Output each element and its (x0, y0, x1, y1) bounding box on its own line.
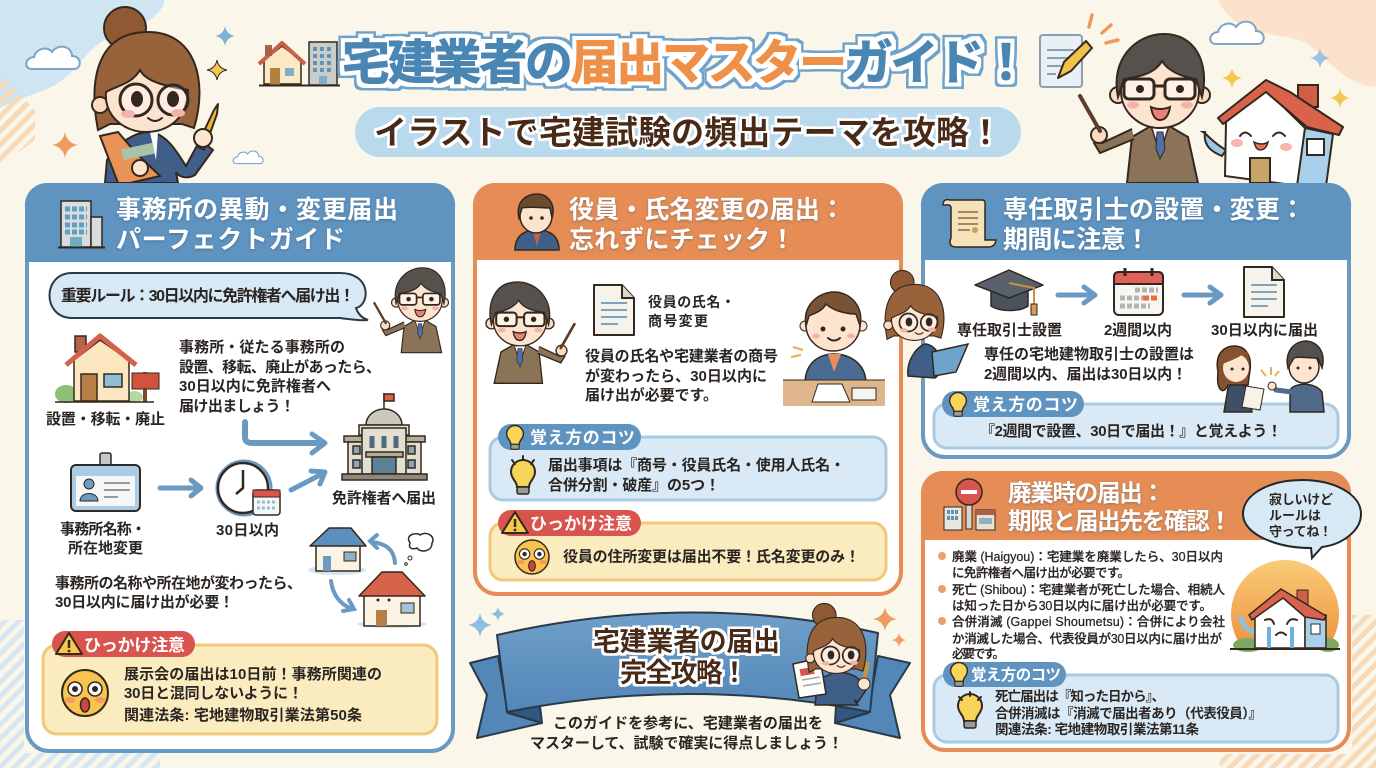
tip text: 関連法条: 宅地建物取引業法第11条 (995, 721, 1200, 737)
icon: surprised face (515, 540, 549, 574)
list of filings (938, 549, 1225, 661)
warning text: 30日と混同しないように！ (124, 685, 303, 702)
tip tag: 覚え方のコツ (530, 428, 635, 448)
labels: 専任取引士設置 (957, 321, 1062, 339)
heading (116, 196, 398, 254)
decorative blob top left (0, 0, 165, 108)
heading: パーフェクトガイド (116, 226, 345, 254)
icon: office building (58, 201, 105, 248)
text (648, 294, 735, 329)
labels: 30日以内に届出 (1211, 322, 1318, 339)
tip text: 合併分割・破産』の5つ！ (548, 476, 720, 494)
character: woman with book (92, 7, 218, 183)
sparkles (52, 26, 1350, 158)
character: man presenter (374, 268, 448, 353)
tip tag: 覚え方のコツ (973, 394, 1078, 414)
warning tag: ひっかけ注意 (530, 514, 632, 534)
list of filings: 廃業 (Haigyou)：宅建業を廃業したら、30日以内 (952, 549, 1223, 564)
tip tag (942, 391, 1084, 417)
arrow (245, 422, 325, 453)
subtitle pill (355, 107, 1021, 157)
panel: closing business (921, 471, 1361, 750)
text (585, 347, 778, 404)
warning text: 展示会の届出は10日前！事務所関連の (124, 665, 382, 683)
label: 設置・移転・廃止 (46, 410, 165, 428)
panel header (473, 183, 903, 260)
text: 専任の宅地建物取引士の設置は (984, 345, 1194, 363)
heading: 廃業時の届出： (1008, 480, 1165, 506)
character: man with pointer (1080, 34, 1210, 183)
heading: 期間に注意！ (1003, 226, 1150, 254)
banner ribbon (468, 603, 910, 752)
callout: speech bubble: ルールは (1269, 508, 1321, 523)
heading: 専任取引士の設置・変更： (1003, 196, 1305, 224)
icon: ID card (71, 453, 140, 511)
labels: 事務所名称・ (60, 520, 146, 538)
list of filings: 合併消滅 (Gappei Shoumetsu)：合併により会社 (952, 614, 1225, 629)
tip text: 死亡届出は『知った日から』、 (995, 689, 1165, 704)
text: 商号変更 (648, 313, 708, 329)
warning box (490, 510, 886, 580)
tip text: 『2週間で設置、30日で届出！』と覚えよう！ (980, 422, 1282, 440)
panel: dedicated broker (921, 183, 1351, 457)
text: 届け出が必要です。 (585, 386, 718, 404)
arrow (1184, 287, 1221, 303)
tip tag (943, 662, 1066, 687)
arrow (291, 471, 325, 490)
icon: sad house with sunset (1230, 560, 1340, 652)
icon: house and building (259, 42, 340, 86)
labels (957, 321, 1318, 339)
character: woman reading, overlapping panels (884, 270, 968, 378)
text: 2週間以内、届出は30日以内！ (984, 366, 1187, 383)
cloud top right (1210, 22, 1264, 44)
cloud top left (26, 47, 80, 69)
warning tag: ひっかけ注意 (84, 636, 185, 655)
subtitle pill: イラストで宅建試験の頻出テーマを攻略！ (374, 114, 1002, 151)
icon: moving houses (308, 528, 433, 628)
callout: speech bubble: 守ってね！ (1269, 524, 1332, 539)
warning box (43, 631, 437, 734)
text: 役員の氏名や宅建業者の商号 (585, 347, 778, 365)
heading: 事務所の異動・変更届出 (116, 196, 398, 224)
callout: key rule: 重要ルール：30日以内に免許権者へ届け出！ (61, 286, 355, 305)
heading (1003, 196, 1305, 254)
icon: surprised face (62, 670, 108, 716)
icon: document (594, 285, 634, 335)
warning tag (52, 631, 195, 657)
warning tag (498, 510, 641, 536)
icon: government building (342, 393, 427, 480)
arrow (160, 480, 201, 496)
heading: 期限と届出先を確認！ (1008, 508, 1232, 534)
panel header (921, 183, 1351, 260)
list of filings: 必要です。 (952, 647, 1005, 661)
warning text: 役員の住所変更は届出不要！氏名変更のみ！ (563, 548, 860, 566)
tip text: 合併消滅は『消滅で届出者あり（代表役員）』 (995, 705, 1262, 721)
banner title: 宅建業者の届出 (593, 627, 780, 657)
tip tag: 覚え方のコツ (971, 665, 1061, 684)
text: が変わったら、30日以内に (585, 367, 767, 385)
warning text: 関連法条: 宅地建物取引業法第50条 (124, 706, 362, 724)
title: 宅建業者の届出マスターガイド！ (342, 37, 1030, 90)
text: rule explanation: 設置、移転、廃止があったら、 (179, 358, 381, 376)
icon: document (1244, 267, 1284, 317)
icon: officer bust (515, 194, 559, 250)
character: happy woman with certificate (793, 603, 870, 705)
text: rule explanation: 30日以内に免許権者へ (179, 377, 331, 395)
list of filings: に免許権者へ届け出が必要です。 (952, 565, 1130, 580)
tip box (490, 424, 886, 500)
icon: calendar (1114, 268, 1163, 315)
list of filings: か消滅した場合、代表役員が30日以内に届け出が (952, 631, 1222, 646)
label: 30日以内 (216, 522, 279, 539)
labels: 所在地変更 (68, 539, 143, 557)
text: rule explanation: 届け出ましょう！ (179, 398, 295, 415)
arrow (1058, 287, 1095, 303)
tip text: 届出事項は『商号・役員氏名・使用人氏名・ (548, 456, 845, 474)
tip box (934, 662, 1338, 742)
label: 免許権者へ届出 (332, 489, 436, 507)
text (984, 345, 1194, 383)
list of filings: 死亡 (Shibou)：宅建業者が死亡した場合、相続人 (952, 582, 1225, 597)
banner caption: マスターして、試験で確実に得点しましょう！ (530, 734, 843, 752)
warning text (124, 665, 382, 724)
icon: graduation cap (975, 270, 1043, 315)
panel: office change (25, 183, 455, 751)
character: smiling house (1203, 80, 1343, 186)
icon: document and pencil (1040, 15, 1118, 87)
heading (569, 196, 845, 254)
character: man presenter (486, 282, 574, 383)
icon: bulb (958, 692, 982, 728)
labels: 2週間以内 (1104, 322, 1172, 339)
banner title (593, 627, 780, 688)
banner title: 完全攻略！ (620, 658, 748, 688)
text: 役員の氏名・ (648, 294, 735, 310)
tip text (995, 689, 1262, 737)
icon: stop sign and shops (944, 479, 995, 530)
heading: 忘れずにチェック！ (569, 226, 795, 254)
labels (60, 520, 146, 557)
text: 事務所の名称や所在地が変わったら、 (55, 574, 302, 592)
text: 30日以内に届け出が必要！ (55, 593, 234, 611)
heading (1008, 480, 1232, 534)
cloud small left (233, 151, 263, 164)
callout: key rule (50, 273, 368, 320)
text: rule explanation: 事務所・従たる事務所の (179, 338, 345, 356)
icon: scroll (943, 200, 996, 247)
callout: speech bubble: 寂しいけど (1269, 492, 1333, 507)
panel header (921, 471, 1351, 540)
decorative sparkles (468, 607, 906, 647)
icon: house with sign (55, 336, 159, 403)
panel header (25, 183, 455, 262)
heading: 役員・氏名変更の届出： (569, 196, 845, 224)
character: boy writing at desk (783, 292, 885, 406)
tip tag (498, 424, 641, 450)
panel: officer change (473, 183, 903, 594)
callout: speech bubble (1243, 480, 1361, 558)
decorative blob top right (1218, 0, 1376, 87)
character: two people talking (1217, 341, 1324, 412)
text (55, 574, 302, 611)
banner caption: このガイドを参考に、宅建業者の届出を (553, 714, 823, 732)
tip box (934, 391, 1338, 448)
icon: bulb (511, 456, 535, 494)
text: rule explanation (179, 338, 381, 415)
list of filings: は知った日から30日以内に届け出が必要です。 (952, 598, 1212, 613)
tip text (548, 456, 845, 494)
icon: clock and calendar (217, 461, 280, 515)
banner caption (530, 714, 843, 752)
